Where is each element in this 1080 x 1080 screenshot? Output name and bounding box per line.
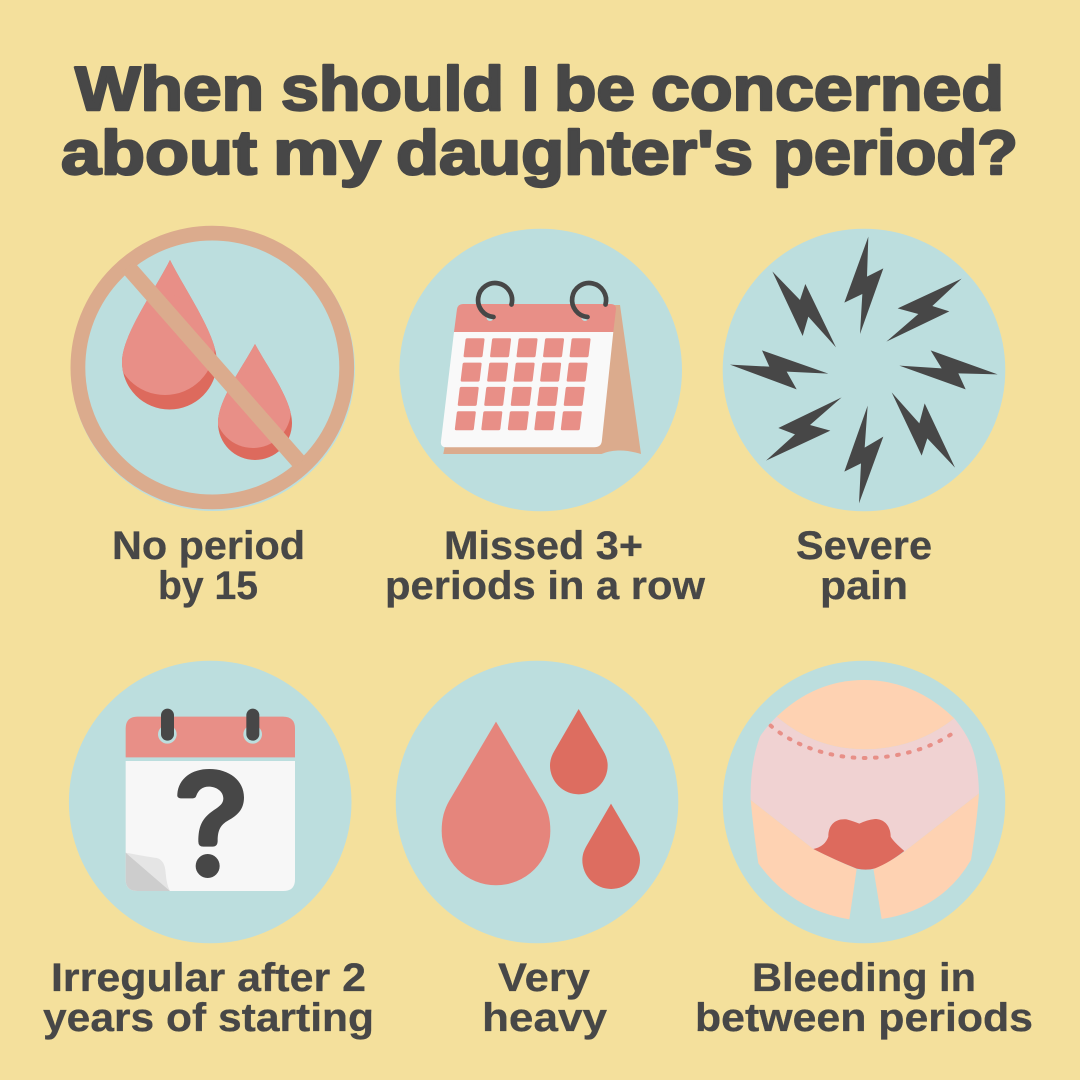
label: bleeding in between periods: between periods bbox=[695, 996, 1033, 1040]
label: no period by 15 bbox=[112, 524, 305, 608]
title: period? bbox=[773, 119, 1018, 188]
label: severe pain bbox=[796, 524, 932, 608]
label: no period by 15: by 15 bbox=[158, 564, 258, 608]
panel: very heavy bbox=[396, 661, 678, 1040]
label: bleeding in between periods bbox=[695, 956, 1033, 1040]
icon: calendar with question mark bbox=[126, 709, 295, 891]
panel: irregular after 2 years bbox=[43, 661, 374, 1040]
panel: missed 3+ periods in a row bbox=[385, 229, 706, 608]
icon: prohibition sign bbox=[78, 233, 347, 502]
label: severe pain: pain bbox=[820, 564, 908, 608]
icon: small blood drop bbox=[218, 344, 292, 460]
label: missed 3+ periods in a row bbox=[385, 524, 706, 608]
label: severe pain: Severe bbox=[796, 524, 932, 568]
icon: underwear with stain bbox=[751, 680, 979, 919]
icon: lightning bolts bbox=[730, 237, 998, 503]
icon: desk calendar bbox=[441, 283, 641, 454]
title: be bbox=[554, 55, 635, 124]
label: very heavy: heavy bbox=[482, 996, 608, 1040]
label: missed 3+ periods in a row: Missed 3+ bbox=[444, 524, 643, 568]
label: very heavy bbox=[482, 956, 608, 1040]
title: I bbox=[522, 55, 539, 124]
label: irregular after 2 years of starting: Irregular after 2 bbox=[51, 956, 366, 1000]
panel: severe pain bbox=[723, 229, 1005, 608]
panel: bleeding in between periods bbox=[695, 661, 1033, 1040]
title: my bbox=[273, 119, 382, 188]
title: daughter's bbox=[396, 119, 753, 188]
title: When bbox=[75, 55, 264, 124]
label: no period by 15: No period bbox=[112, 524, 305, 568]
label: bleeding in between periods: Bleeding in bbox=[752, 956, 976, 1000]
title bbox=[61, 55, 1018, 188]
title: should bbox=[281, 55, 504, 124]
label: missed 3+ periods in a row: periods in a row bbox=[385, 564, 706, 608]
label: irregular after 2 years of starting bbox=[43, 956, 374, 1040]
panel: no period by 15 bbox=[71, 227, 355, 608]
label: irregular after 2 years of starting: years of starting bbox=[43, 996, 374, 1040]
icon: large blood drop bbox=[122, 260, 216, 410]
title: concerned bbox=[651, 55, 1004, 124]
title: about bbox=[61, 119, 257, 188]
label: very heavy: Very bbox=[498, 956, 591, 1000]
icon: three blood drops bbox=[442, 709, 640, 889]
